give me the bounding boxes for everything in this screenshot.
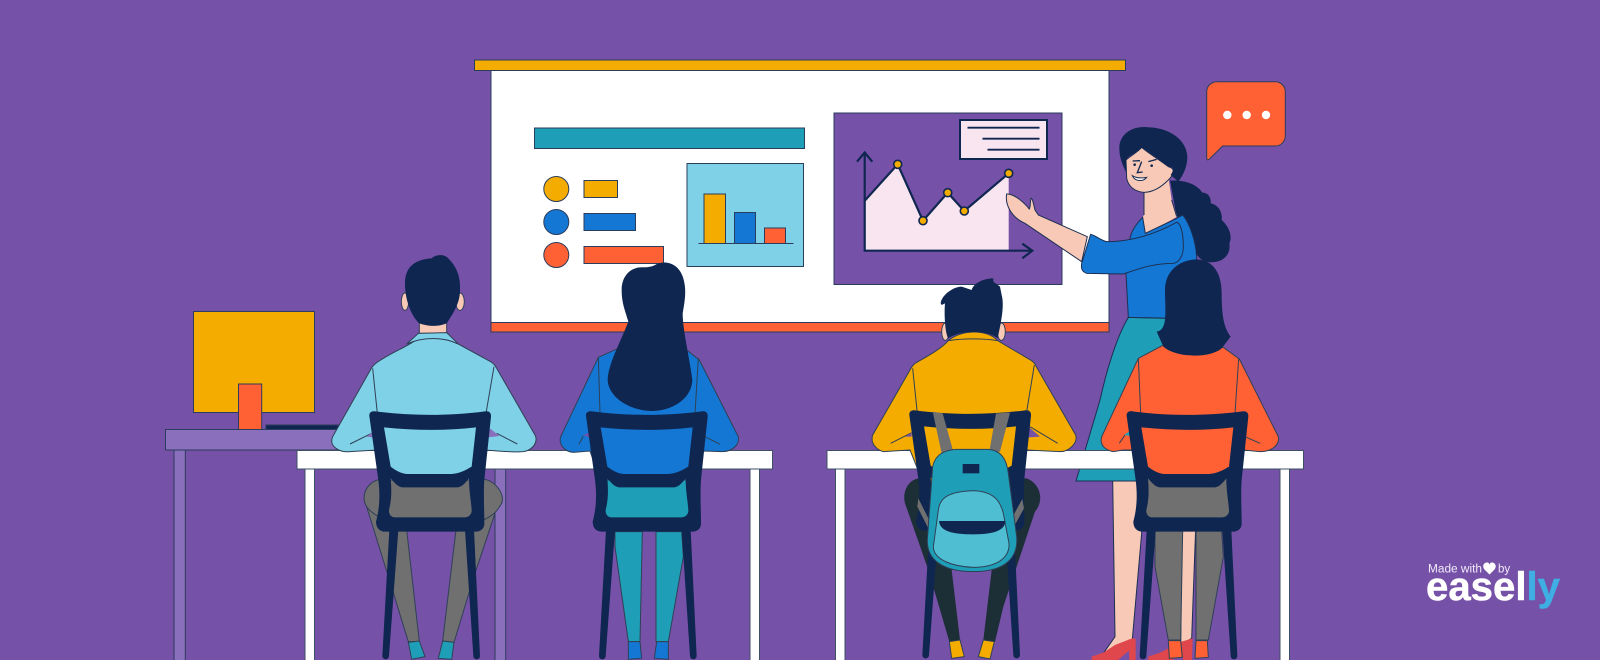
easelly badge (1426, 562, 1561, 609)
gap under arm (905, 427, 1040, 437)
chair (369, 411, 491, 659)
seat (603, 477, 692, 520)
teacher (1006, 127, 1231, 660)
backpack zip (939, 521, 1005, 534)
legs (1155, 531, 1223, 640)
neck (1142, 177, 1177, 235)
gap under arm (1124, 431, 1131, 436)
table right (827, 450, 1304, 660)
icon: heart (1483, 562, 1496, 574)
bar chart (687, 164, 804, 266)
backpack patch (963, 464, 979, 473)
shirt (1101, 345, 1279, 477)
screen white surface (491, 70, 1109, 322)
backpack straps (917, 412, 1024, 528)
face (1126, 147, 1173, 192)
backpack pocket (933, 491, 1009, 567)
sleeve (1081, 222, 1183, 274)
thighs (364, 479, 502, 519)
gap under arm (367, 428, 499, 437)
ponytail (1170, 180, 1231, 262)
projection screen (474, 60, 1126, 332)
legs (367, 507, 495, 642)
screen bottom strip (491, 322, 1109, 332)
hair (405, 255, 460, 326)
student 2: blue shirt, long hair (560, 263, 739, 659)
hair (1119, 127, 1187, 182)
hair (941, 278, 1003, 338)
student 3: amber shirt with backpack (872, 278, 1076, 659)
gap under arm (583, 432, 590, 437)
blouse (1126, 215, 1197, 319)
shirt (332, 338, 536, 480)
chair (909, 410, 1031, 658)
hair (1157, 259, 1231, 356)
purple desk (166, 430, 506, 660)
seat (1143, 473, 1233, 523)
monitor screen (194, 312, 314, 412)
legend list (544, 176, 664, 268)
easelly logo: easelly (1426, 565, 1561, 609)
speech bubble (1207, 82, 1285, 160)
backpack body (927, 449, 1017, 572)
line chart panel (834, 113, 1062, 284)
long hair (608, 263, 692, 411)
ears and neck (401, 293, 464, 333)
facial features (1132, 159, 1157, 181)
shoes (949, 640, 994, 659)
teacher skirt (1076, 317, 1187, 481)
screen top bar (474, 60, 1126, 70)
socks (408, 641, 454, 659)
student 4: orange shirt (1101, 259, 1279, 659)
made with text: Made with (1428, 564, 1482, 576)
slide title bar (534, 128, 804, 148)
monitor stand (238, 384, 262, 430)
teacher legs (1092, 480, 1196, 660)
student 1: light blue shirt (332, 255, 536, 659)
shirt (872, 332, 1076, 483)
ears (942, 323, 1005, 340)
desk with monitor (166, 312, 506, 660)
shoes (1168, 641, 1208, 658)
chair (1127, 411, 1248, 659)
legs (615, 532, 683, 642)
table left (297, 450, 772, 660)
arm and hand (1006, 194, 1087, 262)
chair (586, 411, 708, 659)
keyboard (266, 425, 341, 430)
shirt (560, 348, 739, 480)
by text: by (1498, 564, 1510, 576)
legs and thighs (904, 478, 1040, 642)
shoes (628, 642, 668, 659)
